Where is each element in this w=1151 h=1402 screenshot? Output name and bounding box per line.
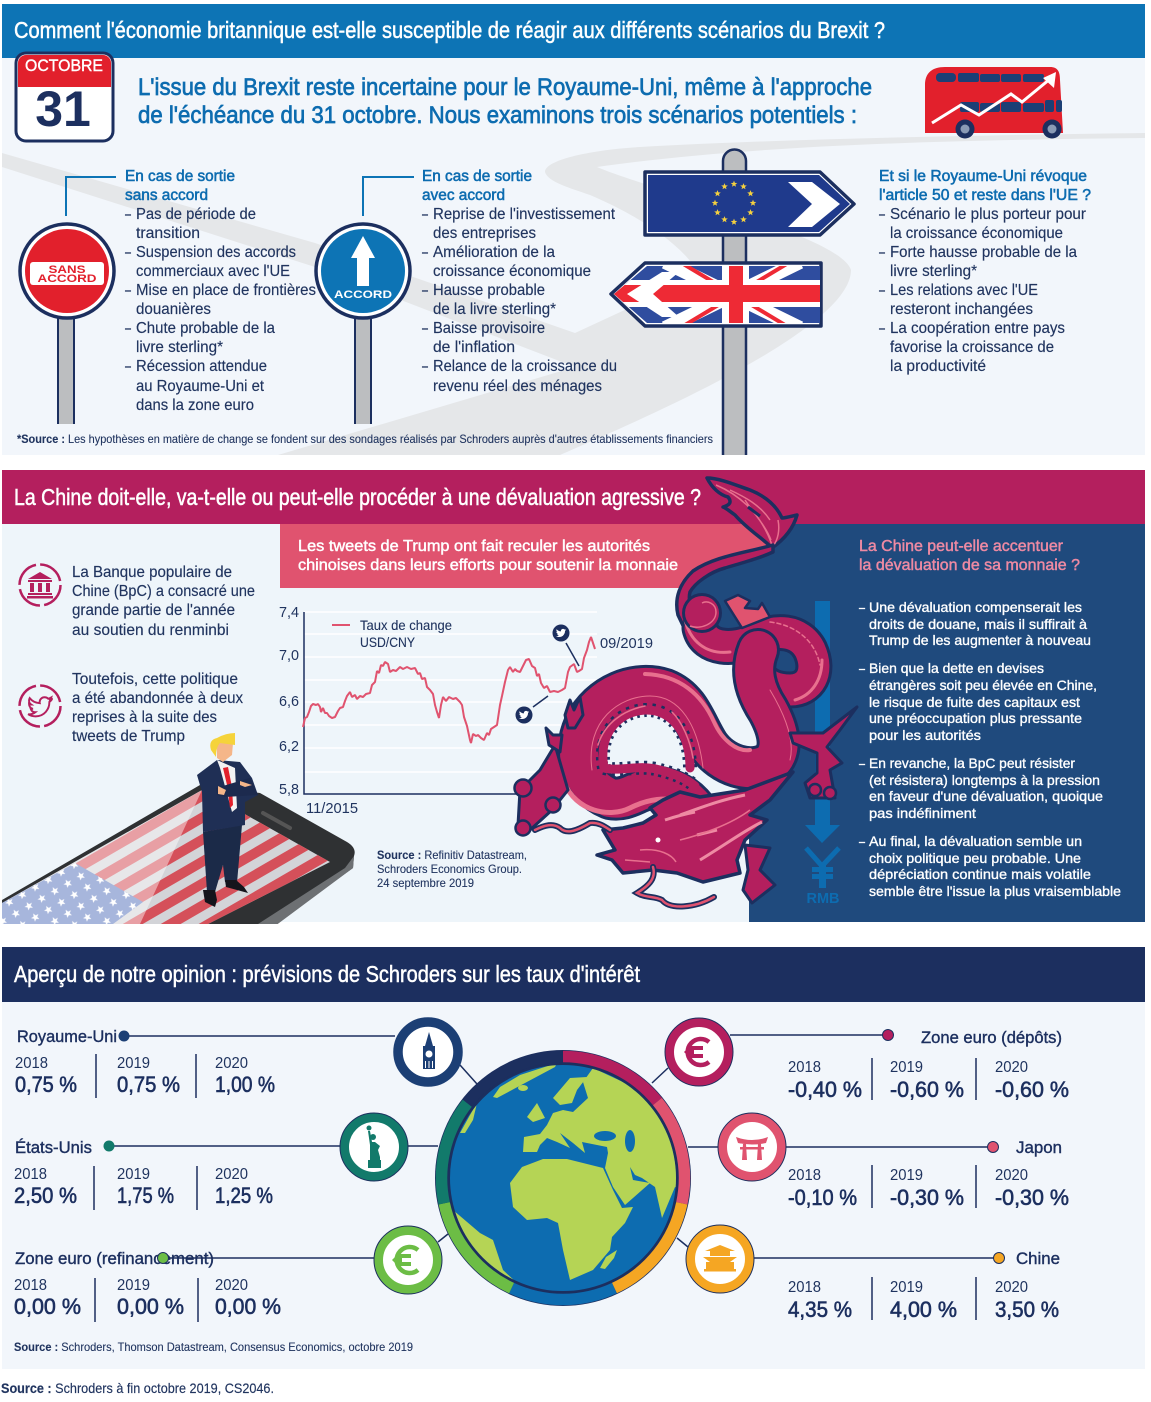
arrow: RMB falling	[805, 601, 840, 907]
data: Zone euro refinancement: 0,00 %	[117, 1294, 184, 1319]
text: devaluation arguments: droits de douane, mais il suffirait à	[869, 616, 1087, 632]
icon: calendar 31 octobre: 31	[35, 81, 91, 137]
header: China	[2, 470, 1145, 524]
text: sortie sans accord: –	[125, 244, 131, 261]
text: tweets	[72, 671, 243, 745]
text: sortie sans accord: dans la zone euro	[136, 397, 254, 414]
text: sortie avec accord: –	[422, 244, 428, 261]
text: révocation de l'article 50: la productivité	[890, 358, 986, 375]
icon: tweet markers	[516, 624, 579, 724]
line chart: USD/CNY: Taux de change	[360, 617, 452, 633]
text: révocation de l'article 50: La coopération entre pays	[890, 320, 1065, 337]
text: tweets: tweets de Trump	[72, 728, 185, 745]
text: People's Bank of China: grande partie de l'année	[72, 602, 235, 619]
header: China: La Chine doit-elle, va-t-elle ou peut-elle procéder à une dévaluation agressive ?	[14, 484, 701, 510]
text: forecast source: Source : Schroders, Thomson Datastream, Consensus Economics, octobre 2019	[14, 1340, 413, 1354]
text: sortie sans accord: au Royaume-Uni et	[136, 378, 265, 395]
text: révocation de l'article 50: livre sterling*	[890, 263, 977, 280]
line chart: USD/CNY: 7,4	[279, 604, 299, 621]
text: chart source: 24 septembre 2019	[377, 876, 474, 890]
line chart: USD/CNY: 09/2019	[600, 635, 653, 652]
text: sortie sans accord: Mise en place de frontières	[136, 282, 316, 299]
data: Chine: 3,50 %	[995, 1297, 1059, 1322]
text: sortie sans accord: transition	[136, 225, 200, 242]
panel: interest rate forecasts	[2, 947, 1145, 1369]
text: sortie sans accord: –	[125, 206, 131, 223]
text: People's Bank of China: Chine (BpC) a consacré une	[72, 583, 255, 600]
data: Zone euro dépôts: 2018	[788, 1059, 821, 1076]
text: révocation de l'article 50: resteront inchangées	[890, 301, 1033, 318]
data: Chine: Chine	[1016, 1249, 1060, 1268]
icon: Big Ben	[398, 1022, 458, 1082]
data: Zone euro dépôts: 2019	[890, 1059, 923, 1076]
data: Royaume-Uni: 2018	[15, 1055, 48, 1072]
text: sortie avec accord: –	[422, 282, 428, 299]
data: Zone euro refinancement: 0,00 %	[215, 1294, 281, 1319]
data: Zone euro dépôts	[788, 1028, 1069, 1102]
dragon curl and crest	[682, 593, 770, 633]
text: révocation de l'article 50: Scénario le plus porteur pour	[890, 206, 1087, 223]
data: Chine	[788, 1249, 1060, 1322]
data: Japon: -0,30 %	[890, 1185, 964, 1210]
data: Royaume-Uni	[15, 1027, 275, 1098]
data: Royaume-Uni: 2019	[117, 1055, 150, 1072]
text: révocation de l'article 50: –	[879, 282, 885, 299]
text: sortie avec accord: des entreprises	[433, 225, 536, 242]
panel: Brexit scenarios	[2, 4, 1145, 455]
sign: sans accord: SANS	[48, 264, 86, 276]
text: tweets: Toutefois, cette politique	[72, 671, 238, 688]
text: devaluation arguments: une préoccupation plus pressante	[869, 710, 1082, 726]
data: Royaume-Uni: 1,00 %	[215, 1072, 275, 1097]
header: forecasts: Aperçu de notre opinion : prévisions de Schroders sur les taux d'intérêt	[14, 961, 641, 987]
text: devaluation arguments: Bien que la dette en devises	[869, 660, 1044, 676]
data: Zone euro dépôts: -0,60 %	[995, 1077, 1069, 1102]
signpost: EU and UK directions	[610, 150, 854, 455]
text: devaluation arguments: –	[859, 660, 865, 676]
icon: Statue of Liberty	[340, 1113, 408, 1181]
text: chart source: Schroders Economics Group.	[377, 862, 522, 876]
text: sortie sans accord: En cas de sortie	[125, 168, 235, 185]
data: Japon: Japon	[1016, 1138, 1062, 1157]
sign: sans accord	[20, 177, 116, 424]
data: États-Unis: 1,75 %	[117, 1183, 174, 1208]
data: Japon: 2020	[995, 1167, 1028, 1184]
text: sortie sans accord: commerciaux avec l'UE	[136, 263, 290, 280]
text: devaluation arguments: pour les autorités	[869, 727, 981, 743]
text: devaluation arguments: pas indéfiniment	[869, 805, 976, 821]
line chart: USD/CNY: 7,0	[279, 647, 299, 664]
text: sortie sans accord: Suspension des accords	[136, 244, 296, 261]
text: révocation de l'article 50: favorise la croissance de	[890, 339, 1054, 356]
data: Royaume-Uni: 0,75 %	[117, 1072, 180, 1097]
line chart: USD/CNY: 6,2	[279, 738, 299, 755]
text: révocation de l'article 50: Et si le Royaume-Uni révoque	[879, 168, 1087, 185]
intro text	[138, 74, 872, 129]
text: révocation de l'article 50: la croissance économique	[890, 225, 1063, 242]
dragon upper coil	[685, 620, 822, 700]
text: devaluation arguments: –	[859, 755, 865, 771]
dragon tail flame	[707, 478, 797, 548]
data: Chine: 2018	[788, 1279, 821, 1296]
text: devaluation arguments: en faveur d'une dévaluation, quoique	[869, 788, 1103, 804]
text: devaluation arguments: étrangères soit peu élevée en Chine,	[869, 677, 1097, 693]
line chart: USD/CNY: USD/CNY	[360, 634, 416, 650]
icon: bank	[20, 564, 60, 606]
text: sortie avec accord: Baisse provisoire	[433, 320, 545, 337]
header: Brexit	[2, 4, 1145, 58]
illustration: smartphone with US flag	[2, 785, 355, 924]
data: Royaume-Uni: 0,75 %	[15, 1072, 77, 1097]
text: devaluation arguments: semble être l'issue la plus vraisemblable	[869, 883, 1121, 899]
text: sortie avec accord: Relance de la croissance du	[433, 358, 617, 375]
text: révocation de l'article 50: –	[879, 244, 885, 261]
data: États-Unis: États-Unis	[15, 1138, 92, 1157]
callout: tweets de Trump: Les tweets de Trump ont fait reculer les autorités	[298, 538, 650, 555]
data: États-Unis: 2018	[14, 1166, 47, 1183]
icon: euro deposits	[665, 1018, 733, 1086]
data: Chine: 2019	[890, 1279, 923, 1296]
data: Chine: 2020	[995, 1279, 1028, 1296]
data: Zone euro dépôts: 2020	[995, 1059, 1028, 1076]
text: tweets: reprises à la suite des	[72, 709, 217, 726]
text: devaluation arguments	[859, 599, 1121, 899]
header: Brexit: Comment l'économie britannique est-elle susceptible de réagir aux différents scénarios du Brexit ?	[14, 17, 885, 43]
data: Royaume-Uni: Royaume-Uni	[17, 1027, 117, 1046]
text: devaluation arguments: –	[859, 599, 865, 615]
text: révocation de l'article 50: –	[879, 206, 885, 223]
icon: calendar 31 octobre: OCTOBRE	[25, 56, 103, 75]
text: devaluation arguments: –	[859, 833, 865, 849]
text: révocation de l'article 50	[879, 168, 1091, 375]
sign: accord: ACCORD	[334, 289, 392, 301]
text: sortie sans accord: –	[125, 320, 131, 337]
data: Zone euro refinancement: Zone euro (refinancement)	[15, 1249, 214, 1268]
data: Zone euro refinancement: 2018	[14, 1277, 47, 1294]
text: sortie avec accord: –	[422, 206, 428, 223]
data: Japon: -0,10 %	[788, 1185, 857, 1210]
data: Japon: 2018	[788, 1167, 821, 1184]
data: États-Unis: 2019	[117, 1166, 150, 1183]
data: États-Unis: 2020	[215, 1166, 248, 1183]
data: Japon: 2019	[890, 1167, 923, 1184]
data: Chine: 4,00 %	[890, 1297, 957, 1322]
data: Zone euro refinancement: 0,00 %	[14, 1294, 81, 1319]
data: États-Unis: 1,25 %	[215, 1183, 273, 1208]
line chart: USD/CNY: 6,6	[279, 693, 299, 710]
text: sortie sans accord: –	[125, 358, 131, 375]
text: chart source: Source : Refinitiv Datastream,	[377, 848, 527, 862]
text: tweets: a été abandonnée à deux	[72, 690, 243, 707]
line chart: USD/CNY: 11/2015	[306, 800, 358, 817]
text: sortie avec accord: –	[422, 358, 428, 375]
text: sortie avec accord: croissance économique	[433, 263, 591, 280]
text: People's Bank of China: au soutien du renminbi	[72, 622, 229, 639]
data: Japon: -0,30 %	[995, 1185, 1069, 1210]
text: devaluation arguments: Au final, la dévaluation semble un	[869, 833, 1082, 849]
arrow: RMB falling: RMB	[806, 890, 840, 907]
text: sortie avec accord	[422, 168, 617, 395]
data: Zone euro refinancement: 2019	[117, 1277, 150, 1294]
data: États-Unis: 2,50 %	[14, 1183, 77, 1208]
text: devaluation arguments: Une dévaluation compenserait les	[869, 599, 1082, 615]
text: sortie sans accord: Chute probable de la	[136, 320, 275, 337]
data: Zone euro dépôts: -0,60 %	[890, 1077, 964, 1102]
text: sortie sans accord	[125, 168, 316, 414]
text: People's Bank of China: La Banque populaire de	[72, 564, 232, 581]
text: révocation de l'article 50: Les relations avec l'UE	[890, 282, 1038, 299]
text: devaluation heading: la dévaluation de sa monnaie ?	[859, 557, 1080, 574]
data: Zone euro dépôts: -0,40 %	[788, 1077, 862, 1102]
text: sortie avec accord: Reprise de l'investissement	[433, 206, 616, 223]
icon: Chinese pagoda	[686, 1225, 754, 1293]
sign: sans accord: ACCORD	[38, 273, 97, 285]
text: révocation de l'article 50: Forte hausse probable de la	[890, 244, 1077, 261]
text: sortie sans accord: Pas de période de	[136, 206, 256, 223]
text: devaluation arguments: (et résistera) longtemps à la pression	[869, 772, 1100, 788]
dragon feet pads	[514, 780, 836, 836]
icon: calendar 31 octobre	[16, 53, 113, 141]
data: Royaume-Uni: 2020	[215, 1055, 248, 1072]
text: devaluation heading: La Chine peut-elle accentuer	[859, 538, 1064, 555]
text: sortie avec accord: Hausse probable	[433, 282, 545, 299]
text: sortie sans accord: douanières	[136, 301, 211, 318]
header: forecasts	[2, 947, 1145, 1002]
callout: tweets de Trump: chinoises dans leurs efforts pour soutenir la monnaie	[298, 557, 678, 574]
icon: red bus with rising arrow	[925, 67, 1063, 138]
panel: dark blue devaluation arguments	[684, 524, 1145, 922]
sign: accord	[316, 177, 414, 424]
panel: China devaluation	[2, 470, 1145, 924]
text: People's Bank of China	[72, 564, 255, 639]
text: devaluation arguments: En revanche, la BpC peut résister	[869, 755, 1075, 771]
line chart: USD/CNY	[279, 604, 653, 817]
intro text: L'issue du Brexit reste incertaine pour le Royaume-Uni, même à l'approche	[138, 74, 872, 101]
text: page source: Source : Schroders à fin octobre 2019, CS2046.	[1, 1380, 274, 1396]
text: sortie avec accord: revenu réel des ménages	[433, 378, 602, 395]
text: devaluation arguments: Trump de les augmenter à nouveau	[869, 632, 1091, 648]
text: devaluation heading	[859, 538, 1080, 574]
dragon head	[535, 772, 793, 906]
data: Zone euro dépôts: Zone euro (dépôts)	[921, 1028, 1062, 1047]
text: révocation de l'article 50: –	[879, 320, 885, 337]
text: sortie avec accord: avec accord	[422, 187, 505, 204]
dragon neck	[677, 545, 773, 640]
icon: twitter bird	[20, 686, 60, 726]
text: devaluation arguments: choix politique peu probable. Une	[869, 850, 1081, 866]
text: sortie sans accord: livre sterling*	[136, 339, 223, 356]
text: sortie avec accord: –	[422, 320, 428, 337]
text: révocation de l'article 50: l'article 50 et reste dans l'UE ?	[879, 187, 1091, 204]
icon: torii gate	[718, 1113, 786, 1181]
text: sortie sans accord: Récession attendue	[136, 358, 267, 375]
connectors	[109, 1035, 999, 1258]
line chart: USD/CNY: 5,8	[279, 781, 299, 798]
text: sortie avec accord: de l'inflation	[433, 339, 515, 356]
footnote: source des hypothèses: *Source : Les hypothèses en matière de change se fondent sur des sondages réalisés par Schroders auprès d'autres établissements financiers	[17, 432, 713, 446]
dragon main body	[564, 650, 791, 815]
intro text: de l'échéance du 31 octobre. Nous examinons trois scénarios potentiels :	[138, 102, 857, 129]
data: Zone euro refinancement: 2020	[215, 1277, 248, 1294]
text: devaluation arguments: le risque de fuite des capitaux est	[869, 694, 1080, 710]
callout: tweets de Trump	[280, 524, 790, 588]
globe	[435, 1050, 695, 1306]
data: Japon	[788, 1138, 1069, 1210]
data: Chine: 4,35 %	[788, 1297, 852, 1322]
text: sortie avec accord: Amélioration de la	[433, 244, 555, 261]
data: États-Unis	[14, 1138, 273, 1210]
text: sortie sans accord: sans accord	[125, 187, 208, 204]
text: devaluation arguments: dépréciation continue mais volatile	[869, 866, 1091, 882]
icon: euro refinancing	[374, 1226, 442, 1294]
data: Zone euro refinancement	[14, 1249, 281, 1322]
text: sortie avec accord: de la livre sterling*	[433, 301, 556, 318]
text: chart source	[377, 848, 527, 890]
winding road	[2, 133, 1145, 455]
illustration: Trump	[197, 733, 258, 907]
text: sortie avec accord: En cas de sortie	[422, 168, 532, 185]
text: sortie sans accord: –	[125, 282, 131, 299]
dragon legs and mane	[518, 697, 857, 903]
illustration: dragon	[514, 478, 857, 906]
